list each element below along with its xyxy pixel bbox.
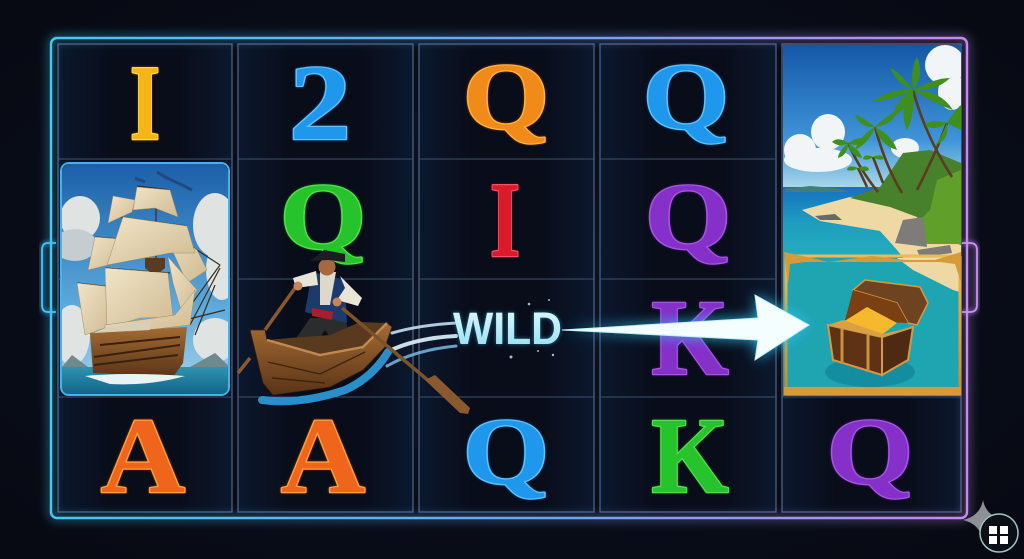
clouds xyxy=(62,193,228,363)
clouds xyxy=(784,45,966,172)
rigging xyxy=(77,186,225,335)
hills xyxy=(62,353,230,367)
pirate head xyxy=(318,258,336,276)
symbol: 2 blue: 2 xyxy=(289,43,351,163)
hull xyxy=(90,327,187,377)
symbol: Q blue top: Q xyxy=(643,45,729,149)
symbol: A orange second: A xyxy=(281,397,365,516)
WILD label: WILD xyxy=(453,303,562,354)
symbol: Q purple bottom: Q xyxy=(827,400,913,504)
left neon tab xyxy=(42,243,56,312)
symbol: Q blue bottom: Q xyxy=(463,400,549,504)
panel: pirate ship card xyxy=(53,162,238,397)
sea xyxy=(783,187,961,396)
flags xyxy=(135,172,192,190)
treasure frame xyxy=(784,252,961,395)
rocks xyxy=(895,217,952,257)
treasure chest xyxy=(825,280,928,387)
symbol: I red: I xyxy=(490,161,520,280)
symbol: Q orange: Q xyxy=(463,45,549,149)
sea xyxy=(62,367,228,394)
right oar xyxy=(342,308,430,382)
outer neon frame xyxy=(51,38,967,518)
symbol: A orange first: A xyxy=(101,397,185,516)
pirate in rowboat xyxy=(238,250,470,414)
palm fronds xyxy=(832,57,961,171)
symbol: I yellow: I xyxy=(130,44,160,163)
crow's nest xyxy=(145,258,165,272)
boat hull xyxy=(250,323,392,395)
symbol: K green: K xyxy=(651,397,729,516)
panel: reel grid xyxy=(58,44,961,512)
wake xyxy=(85,374,185,384)
sails xyxy=(77,187,207,335)
water trail streaks xyxy=(262,323,456,401)
pirate torso xyxy=(305,272,347,323)
distant islands xyxy=(785,186,850,192)
card border xyxy=(61,163,229,395)
jungle xyxy=(850,150,961,245)
right neon tab xyxy=(962,243,977,312)
badge: corner logo xyxy=(980,514,1018,552)
pirate legs xyxy=(293,318,353,350)
beach xyxy=(802,190,961,292)
palm trunks xyxy=(848,90,952,193)
icon: gemini sparkle xyxy=(963,500,1004,541)
symbol: Q green: Q xyxy=(280,165,366,269)
WILD label: WILD xyxy=(453,303,562,354)
sparkle particles xyxy=(510,299,554,358)
left oar xyxy=(238,288,295,373)
panel: island and treasure xyxy=(783,45,966,396)
symbol: Q purple middle: Q xyxy=(645,165,731,269)
symbol: K purple: K xyxy=(651,279,729,398)
treasure water xyxy=(786,258,960,394)
WILD arrow xyxy=(562,295,809,360)
pirate arms xyxy=(293,271,362,306)
